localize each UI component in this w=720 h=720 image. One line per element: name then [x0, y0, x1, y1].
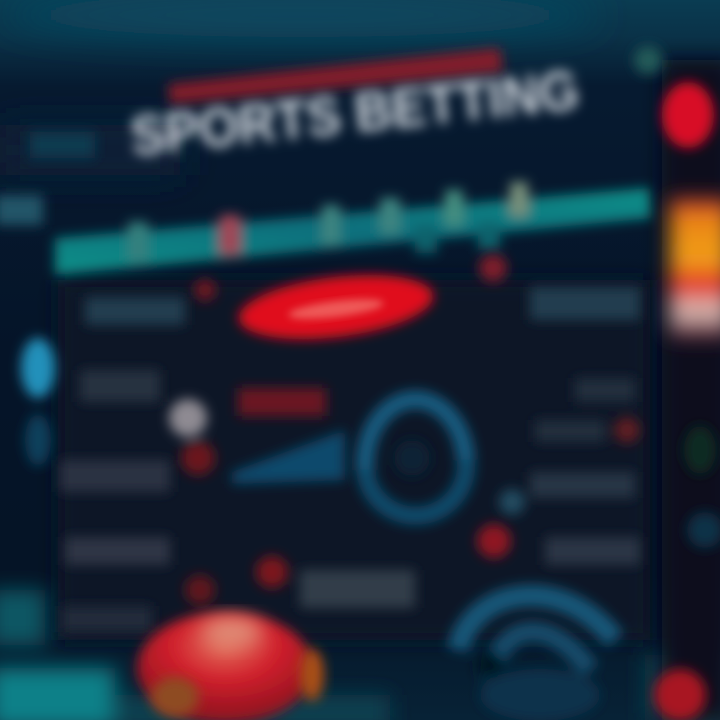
centre lower text and dots: [185, 524, 511, 608]
right column text blocks: [499, 378, 640, 565]
heading: red banner: [168, 48, 503, 104]
right side strip: [634, 46, 720, 720]
icon: red apple: [137, 612, 324, 720]
heading: title text: SPORTS BETTING: [128, 58, 582, 167]
red pill: [235, 265, 437, 349]
teal band chart: [55, 182, 652, 275]
left heading smudge: [0, 132, 95, 225]
upper side text blocks: [85, 287, 640, 325]
donut chart: [365, 400, 466, 516]
bottom left teal floor: [0, 590, 720, 720]
right strip: dark backing: [662, 60, 720, 720]
right strip: green dot: [634, 46, 662, 74]
dashboard panel: [58, 280, 650, 640]
centre red label: [238, 388, 326, 416]
heading: [128, 48, 582, 167]
right strip: red circle: [662, 82, 714, 148]
right strip: green blur: [684, 426, 716, 474]
left column text blocks: [60, 370, 170, 632]
left blue blobs: [21, 338, 55, 466]
band markers: [128, 222, 148, 262]
right strip: blue blur: [687, 512, 720, 548]
bottom right blue gauge: [458, 596, 615, 720]
top glow: [0, 0, 600, 175]
red dots row: [194, 254, 507, 301]
centre icons: light and red dots: [169, 399, 215, 475]
right strip: flame panel: [670, 198, 720, 338]
centre blue area: [232, 430, 345, 484]
right strip: red ball: [654, 669, 706, 720]
